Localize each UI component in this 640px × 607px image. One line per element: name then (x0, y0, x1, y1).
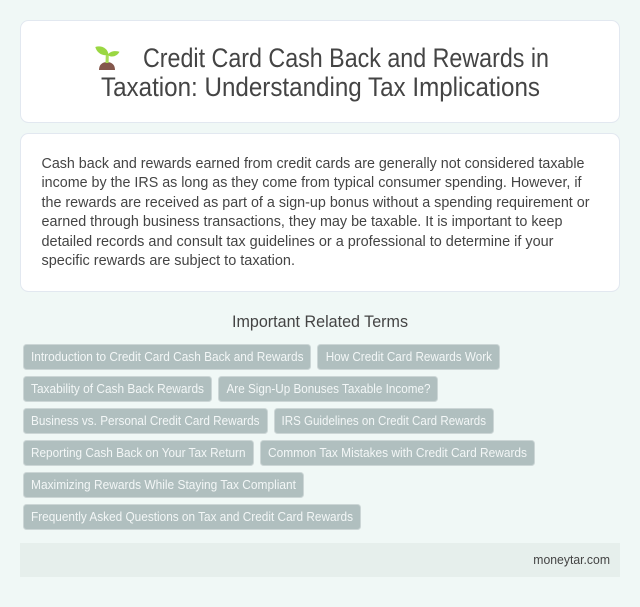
chip: FAQ: Frequently Asked Questions on Tax and Credit Card Rewards (31, 509, 353, 524)
chip: reporting (24, 440, 254, 466)
footer (20, 543, 620, 577)
summary text block: specific rewards are subject to taxation. (42, 252, 295, 269)
chip: sign-up bonuses (218, 376, 438, 402)
summary text block: income by the IRS as long as they come from typical consumer spending. However, if (42, 174, 582, 191)
summary text block: detailed records and consult tax guidelines or a professional to determine if your (42, 233, 554, 250)
chip: introduction (24, 344, 310, 370)
chip: business vs personal: Business vs. Personal Credit Card Rewards (31, 413, 260, 428)
chip: business vs personal (24, 408, 268, 434)
chip: how rewards work: How Credit Card Rewards Work (326, 349, 492, 364)
chip: introduction: Introduction to Credit Card Cash Back and Rewards (31, 349, 304, 364)
summary text block (42, 155, 590, 269)
chip: maximizing (24, 472, 304, 498)
chip: sign-up bonuses: Are Sign-Up Bonuses Taxable Income? (226, 381, 430, 396)
chip: common mistakes (260, 440, 534, 466)
icon: seedling (95, 46, 120, 70)
panel: title (20, 20, 620, 122)
chip: FAQ (24, 504, 360, 530)
chip: how rewards work (318, 344, 500, 370)
chip: taxability (24, 376, 212, 402)
summary text block: earned through business transactions, they may be taxable. It is important to keep (42, 213, 562, 230)
title text: Credit Card Cash Back and Rewards in (143, 43, 549, 73)
chip: IRS guidelines (274, 408, 494, 434)
chip: common mistakes: Common Tax Mistakes with Credit Card Rewards (268, 445, 527, 460)
title text (101, 43, 549, 102)
panel: summary (20, 134, 620, 292)
chip: reporting: Reporting Cash Back on Your Tax Return (31, 445, 246, 460)
summary text block: Cash back and rewards earned from credit cards are generally not considered taxable (42, 155, 584, 172)
summary text block: the rewards are received as part of a sign-up bonus without a spending requirement or (42, 194, 590, 211)
chip: maximizing: Maximizing Rewards While Staying Tax Compliant (31, 477, 296, 492)
title text: Taxation: Understanding Tax Implications (101, 72, 540, 102)
related terms chips (24, 344, 534, 530)
heading: related terms: Important Related Terms (232, 313, 408, 331)
chip: taxability: Taxability of Cash Back Rewards (31, 381, 204, 396)
footer source text: moneytar.com (533, 552, 610, 567)
chip: IRS guidelines: IRS Guidelines on Credit Card Rewards (282, 413, 486, 428)
